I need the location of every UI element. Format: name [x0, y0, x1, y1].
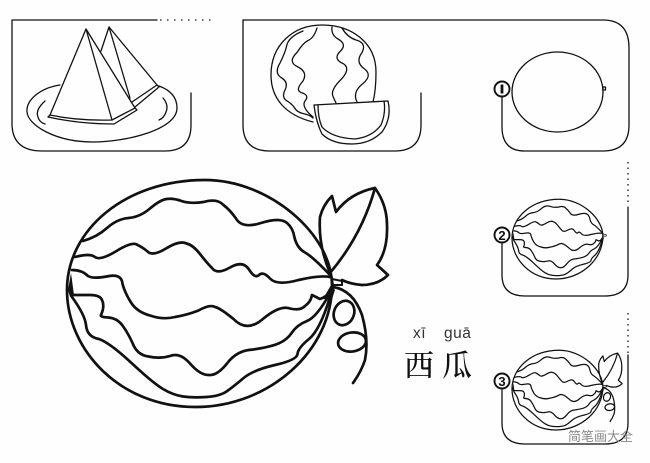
panel: watermelon slices on a plate [12, 20, 213, 151]
panel: whole watermelon with a cut slice [243, 20, 629, 151]
label: pinyin xi gua: xī [413, 325, 426, 342]
panel: step 1 [494, 52, 606, 132]
panel: step 2: 2 [498, 228, 506, 243]
panel: step 2 [494, 162, 628, 296]
panel: step 3 [494, 313, 628, 444]
watermark: 简笔画大全: 简笔画大全 [568, 429, 633, 444]
title: 西瓜: 西瓜 [404, 350, 480, 383]
illustration: large watermelon with leaf [67, 180, 388, 407]
panel: step 3: 3 [498, 374, 506, 389]
label: pinyin xi gua: guā [444, 325, 471, 342]
label: pinyin xi gua [413, 325, 471, 342]
